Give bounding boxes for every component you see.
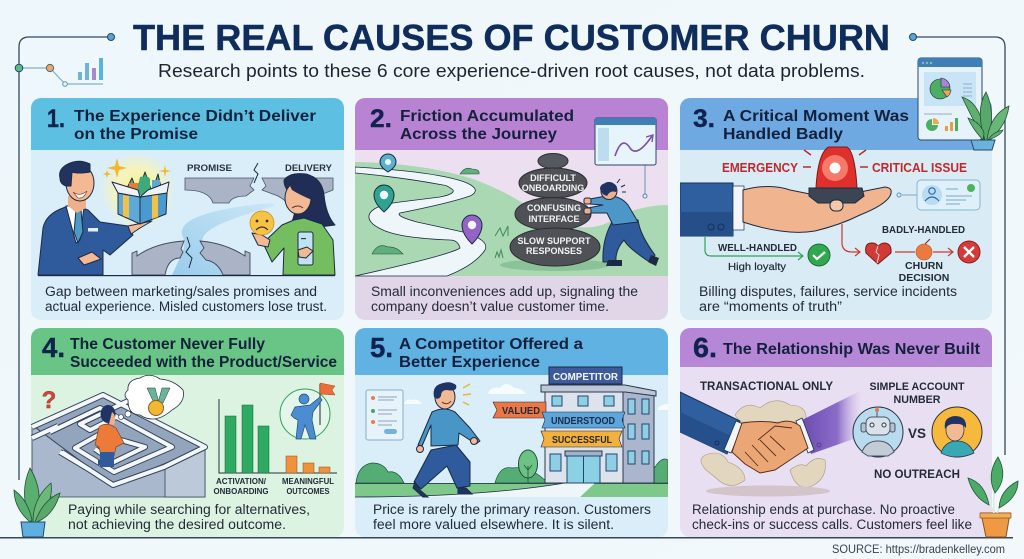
ribbon: valued: [493, 402, 546, 418]
chart labels: ONBOARDING: [214, 487, 268, 496]
icon: sad face: [250, 211, 274, 235]
simple account number label: NUMBER: [894, 394, 941, 406]
competitor building: [541, 385, 656, 483]
panel 1 header: [31, 98, 344, 150]
bridge: promise: [185, 178, 254, 203]
panel 2 text: Small inconveniences add up, signaling the: [371, 284, 638, 299]
competitor sign: [549, 367, 622, 384]
clouds: [404, 384, 668, 410]
panel 5 number: 5.: [370, 332, 393, 363]
critical issue label: CRITICAL ISSUE: [872, 160, 967, 175]
panel 5 text: [373, 502, 651, 532]
tree: [518, 450, 538, 484]
icon: sparkles: [103, 158, 171, 178]
ribbon: successful: SUCCESSFUL: [552, 435, 612, 446]
panel 3 heading: Handled Badly: [723, 126, 843, 143]
simple account number label: [870, 381, 965, 406]
stone labels: [517, 173, 591, 256]
panel 1 text: actual experience. Misled customers lose trust.: [45, 299, 327, 314]
chart labels: OUTCOMES: [286, 487, 330, 496]
sleeve: [680, 183, 744, 236]
panel 2 sky: [355, 150, 668, 228]
customer figure: [252, 174, 335, 275]
stones: difficult onboarding / confusing interface / slow support: [500, 154, 610, 271]
stone labels: INTERFACE: [528, 214, 580, 224]
competitor sign: COMPETITOR: [553, 371, 618, 383]
stone labels: DIFFICULT: [530, 173, 576, 183]
thought bubble with medal: [118, 375, 184, 420]
happy walking man: [413, 382, 480, 497]
panel 2 number: 2.: [370, 105, 392, 133]
panel 3 heading: [723, 108, 909, 143]
promise label: PROMISE: [187, 163, 232, 174]
emergency label: EMERGENCY: [722, 160, 798, 175]
dust clouds: [701, 401, 825, 487]
man pushing stones: [584, 179, 659, 266]
panel 1 number: 1.: [47, 105, 65, 133]
icon: broken heart: [866, 243, 891, 264]
chart labels: [214, 477, 334, 496]
badly-handled label: BADLY-HANDLED: [882, 224, 965, 236]
panel 2 header: [355, 98, 668, 150]
ribbon: successful: [541, 431, 622, 447]
panel 3 text: [699, 284, 957, 314]
simple account number label: SIMPLE ACCOUNT: [870, 381, 965, 393]
ground line: [38, 275, 335, 276]
panel 6: relationship: [680, 328, 992, 537]
handshake: [680, 390, 862, 473]
chart labels: MEANINGFUL: [282, 477, 334, 486]
churn decision label: DECISION: [899, 272, 949, 284]
winding road: [355, 167, 486, 276]
panel 3 header: [680, 98, 992, 150]
label dashes: [803, 150, 868, 167]
map pins: [374, 154, 482, 244]
motion marks: [463, 384, 471, 405]
panel 2 hills: [355, 162, 668, 276]
icon: robot: [853, 407, 903, 457]
no outreach label: NO OUTREACH: [874, 467, 960, 481]
stone labels: ONBOARDING: [522, 183, 584, 193]
panel 1 text: [45, 284, 327, 314]
panel 5 text: feel more valued elsewhere. It is silent.: [373, 517, 614, 532]
panel 4: never succeeded: [31, 328, 344, 537]
transactional only label: TRANSACTIONAL ONLY: [700, 381, 833, 393]
title: THE REAL CAUSES OF CUSTOMER CHURN: [133, 17, 890, 58]
panel 4 text: not achieving the desired outcome.: [68, 517, 286, 532]
salesman figure: [38, 161, 152, 275]
bar chart: activation vs outcomes: [219, 399, 337, 473]
panel 2 heading: Friction Accumulated: [400, 108, 574, 125]
panel 6 number: 6.: [693, 332, 717, 363]
high loyalty label: High loyalty: [728, 261, 787, 273]
ground: [355, 483, 668, 497]
panel 1 heading: [74, 108, 316, 143]
panel 3 text: Billing disputes, failures, service incidents: [699, 284, 957, 299]
panel 4 text: [68, 502, 310, 532]
panel 1 glow: [102, 154, 174, 225]
panel 2 heading: [400, 108, 574, 143]
baseline rule: [0, 537, 1013, 538]
crack: [186, 163, 258, 268]
panel 4 heading: [70, 336, 337, 371]
river gap: [172, 203, 275, 275]
vs label: VS: [908, 426, 926, 441]
panel 1 heading: on the Promise: [74, 126, 198, 143]
panel 5 heading: [399, 336, 583, 371]
icon: question mark: ?: [42, 387, 56, 414]
panel 4 heading: The Customer Never Fully: [70, 336, 265, 353]
panel 1: promise gap: [31, 98, 344, 320]
person in maze: [95, 405, 124, 467]
bushes and grass: [372, 168, 508, 258]
churn decision connector and fruit: [895, 239, 953, 260]
decorative circuit: right: [910, 34, 1005, 455]
panel 4 text: Paying while searching for alternatives,: [68, 502, 310, 517]
stone labels: SLOW SUPPORT: [517, 236, 591, 246]
panel 2: friction: [355, 98, 668, 320]
panel 3 number: 3.: [693, 105, 715, 133]
icon: person with flag: [280, 383, 335, 439]
churn decision label: [899, 260, 949, 284]
panel 5 header: [355, 328, 668, 375]
subtitle: Research points to these 6 core experience-driven root causes, not data problems.: [158, 61, 865, 81]
document icon: [366, 390, 403, 440]
churn decision label: CHURN: [905, 260, 943, 272]
panel 5: competitor: [355, 328, 668, 537]
panel 3 text: are “moments of truth”: [699, 299, 842, 314]
icon: green check: [808, 244, 830, 266]
panel 6 header: [680, 328, 992, 367]
stone labels: CONFUSING: [527, 203, 581, 213]
lower broken bridge: [132, 241, 250, 275]
thumb: [830, 200, 843, 211]
bridge: delivery: [262, 178, 333, 203]
panel 1 text: Gap between marketing/sales promises and: [45, 284, 317, 299]
maze: [32, 393, 205, 497]
panel 3: critical moment: [680, 98, 992, 320]
well-handled path: [705, 237, 803, 260]
chart labels: ACTIVATION/: [216, 477, 267, 486]
panel 6 text: check-ins or success calls. Customers feel like: [692, 517, 972, 532]
panel 5 heading: A Competitor Offered a: [399, 336, 583, 353]
panel 6 heading: The Relationship Was Never Built: [723, 341, 981, 358]
icon: person: [932, 407, 982, 457]
ribbon: understood: [542, 412, 625, 428]
panel 6 text: Relationship ends at purchase. No proactive: [692, 502, 955, 517]
panel 2 text: [371, 284, 638, 314]
gift box: [112, 172, 169, 224]
panel 2 heading: Across the Journey: [400, 126, 557, 143]
decorative circuit: left, with mini bar chart: [15, 34, 115, 480]
source credit: SOURCE: https://bradenkelley.com: [832, 542, 1005, 556]
badly-handled path: [842, 224, 860, 256]
account card: [897, 180, 980, 210]
dashboard with trend line: [595, 118, 656, 198]
ribbon: valued: VALUED: [502, 406, 540, 417]
panel 6 text: [692, 502, 972, 532]
top-right dashboard illustration: [918, 58, 982, 140]
stone labels: RESPONSES: [526, 246, 582, 256]
icon: red X: [958, 241, 980, 263]
hand: [743, 186, 891, 232]
ribbon: understood: UNDERSTOOD: [551, 416, 615, 427]
siren: [809, 147, 864, 203]
delivery label: DELIVERY: [285, 163, 333, 174]
panel 5 text: Price is rarely the primary reason. Customers: [373, 502, 651, 517]
well-handled label: WELL-HANDLED: [718, 242, 797, 254]
plant bottom left: [14, 468, 60, 537]
panel 4 heading: Succeeded with the Product/Service: [70, 354, 337, 371]
plant top right: [962, 92, 1009, 150]
panel 4 header: [31, 328, 344, 375]
bushes: [356, 459, 668, 483]
panel 1 heading: The Experience Didn’t Deliver: [74, 108, 316, 125]
panel 4 number: 4.: [42, 332, 65, 363]
panel 3 heading: A Critical Moment Was: [723, 108, 909, 125]
panel 5 heading: Better Experience: [399, 354, 540, 371]
plant bottom right: [968, 457, 1018, 537]
panel 2 text: company doesn’t value customer time.: [371, 299, 609, 314]
